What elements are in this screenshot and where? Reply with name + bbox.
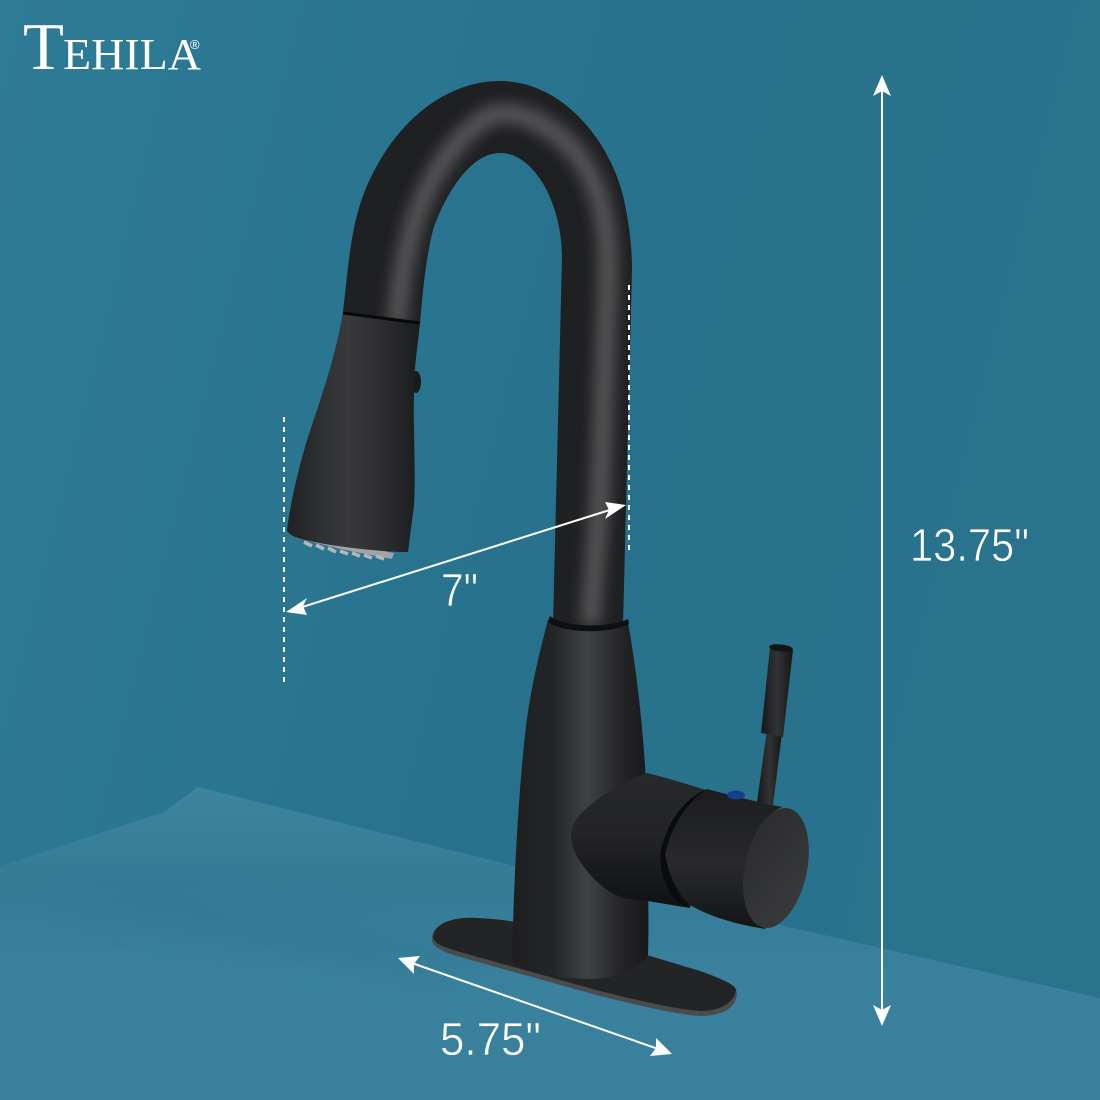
dimension: reach 7 (284, 285, 629, 685)
brand logo: Tehila (23, 10, 201, 84)
spout gooseneck (343, 81, 632, 625)
dimension: total height 13.75: 13.75" (910, 519, 1029, 571)
knob end disc (733, 802, 819, 934)
dimension: total height 13.75 (873, 75, 1029, 1026)
dimension: base plate 5.75: 5.75" (440, 1013, 541, 1065)
brand logo: Tehila: EHILA (63, 30, 201, 79)
deck plate (432, 918, 737, 1016)
blue indicator dot (727, 790, 745, 800)
faucet body (512, 620, 648, 979)
dimension: reach 7: 7" (441, 564, 478, 616)
counter top (0, 787, 1100, 1100)
spray head (287, 312, 421, 559)
spray nozzle dots (304, 542, 384, 559)
lever handle (757, 643, 793, 805)
dimension: base plate 5.75 (398, 956, 672, 1065)
handle knob (660, 789, 819, 934)
brand logo: Tehila: T (23, 10, 64, 84)
spout ring seam (343, 313, 420, 323)
collar ring at body top (548, 616, 629, 631)
faucet (287, 81, 819, 1016)
brand logo: Tehila: ® (190, 37, 200, 52)
handle arm (571, 773, 712, 908)
